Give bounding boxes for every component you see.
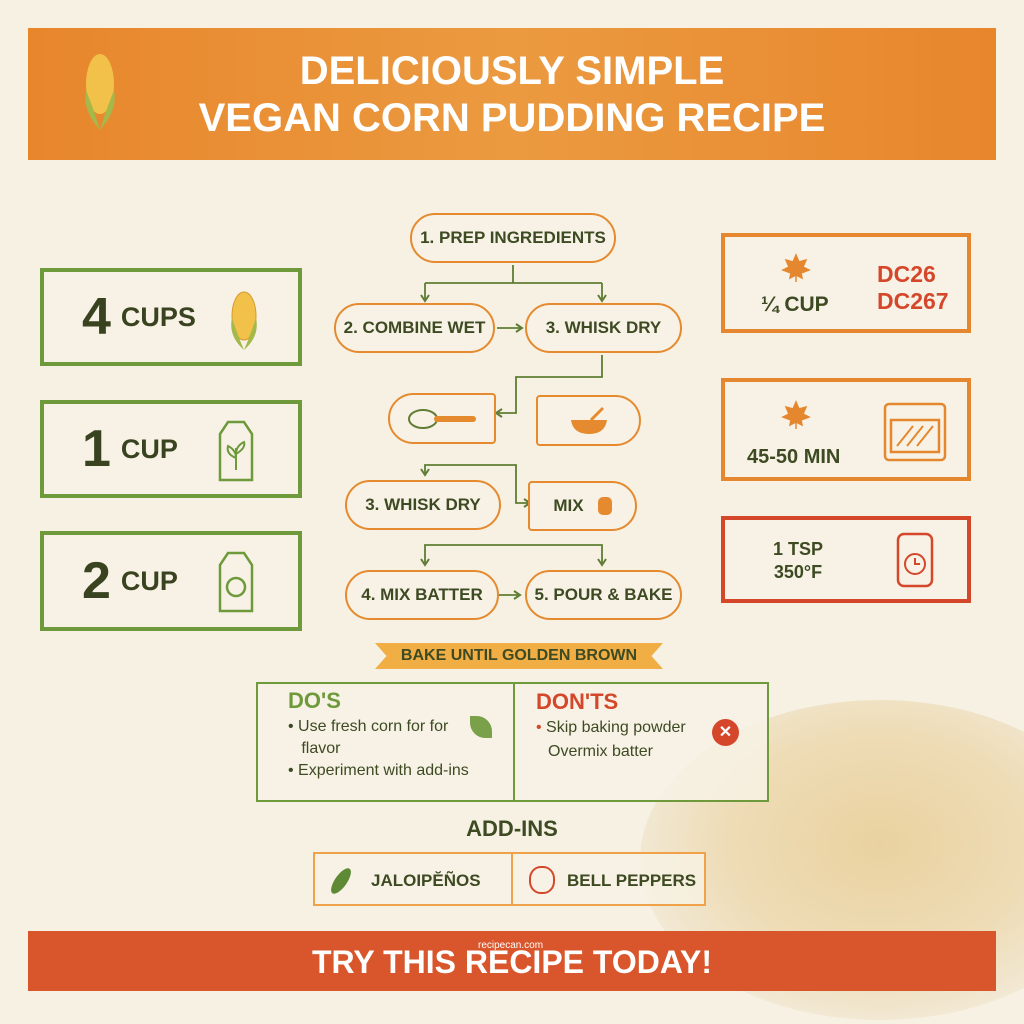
step 3 repeat: 3. WHISK DRY <box>365 495 481 514</box>
step 5 <box>525 570 682 620</box>
step 2: 2. COMBINE WET <box>344 318 485 337</box>
background pudding dish <box>640 700 1024 1020</box>
panel: 2 cup <box>40 531 302 631</box>
donts: DON'TS <box>536 689 618 714</box>
title: DELICIOUSLY SIMPLE <box>300 49 724 93</box>
dos: • Use fresh corn for for <box>288 718 448 735</box>
donts: • Skip baking powder <box>536 719 686 736</box>
panel: temp: 1 TSP <box>773 539 823 559</box>
panel: add-ins: BELL PEPPERS <box>567 871 696 890</box>
dos: • Experiment with add-ins <box>288 762 469 779</box>
title: VEGAN CORN PUDDING RECIPE <box>199 96 825 140</box>
icon: corn <box>85 54 115 130</box>
panel: 4 cups <box>40 268 302 366</box>
ribbon banner <box>375 643 663 669</box>
step mix: MIX <box>553 496 584 515</box>
dos: flavor <box>301 740 340 757</box>
step 3 repeat <box>345 480 501 530</box>
icon: leaf <box>470 716 492 738</box>
step 3: 3. WHISK DRY <box>546 318 661 337</box>
panel: 1/4 cup <box>721 233 971 333</box>
step 4 <box>345 570 499 620</box>
panel: 1/4 cup: DC267 <box>877 288 949 314</box>
panel: 1/4 cup: DC26 <box>877 261 936 287</box>
icon: whisk <box>388 393 496 444</box>
icon: x: ✕ <box>719 724 732 741</box>
footer banner: TRY THIS RECIPE TODAY! <box>312 944 712 980</box>
panel: 1 cup: 1 <box>82 420 111 478</box>
panel: 2 cup: 2 <box>82 552 111 610</box>
icon: bowl <box>536 395 641 446</box>
panel: dos and donts <box>256 682 769 802</box>
panel: 4 cups: CUPS <box>121 302 196 332</box>
footer banner <box>28 931 996 991</box>
header banner <box>28 28 996 160</box>
donts: Overmix batter <box>548 743 653 760</box>
step 1: 1. PREP INGREDIENTS <box>420 228 606 247</box>
panel: time: 45-50 MIN <box>747 446 840 468</box>
step 3 <box>525 303 682 353</box>
panel: 1/4 cup: ¼ CUP <box>761 293 829 316</box>
panel: 2 cup: CUP <box>121 566 178 596</box>
step 1 <box>410 213 616 263</box>
panel: temp: 350°F <box>774 562 822 582</box>
icon: leaf <box>781 400 811 429</box>
panel: 4 cups: 4 <box>82 288 111 346</box>
step 2 <box>334 303 495 353</box>
arrows <box>420 265 607 600</box>
step 4: 4. MIX BATTER <box>361 585 483 604</box>
icon: can <box>896 532 934 588</box>
icon: milk carton <box>218 420 254 482</box>
dos <box>288 688 492 779</box>
panel: 1 cup <box>40 400 302 498</box>
icon: bell pepper <box>529 866 555 894</box>
donts <box>536 689 739 760</box>
add-ins title: ADD-INS <box>466 816 558 841</box>
step mix <box>528 481 637 531</box>
icon: leaf <box>781 253 811 282</box>
footer banner: recipecan.com <box>478 940 543 951</box>
panel: time <box>721 378 971 481</box>
panel: 1 cup: CUP <box>121 434 178 464</box>
panel: add-ins <box>313 852 706 906</box>
icon: x <box>712 719 739 746</box>
panel: add-ins: JALOIPĔÑOS <box>371 871 481 890</box>
panel: temp <box>721 516 971 603</box>
flowchart <box>334 213 682 620</box>
icon: carton <box>218 552 254 612</box>
step 5: 5. POUR & BAKE <box>535 585 672 604</box>
icon: jalapeno <box>327 865 355 897</box>
dos: DO'S <box>288 688 341 713</box>
icon: corn <box>231 292 257 350</box>
title <box>198 49 825 140</box>
icon: oven <box>884 402 946 462</box>
ribbon banner: BAKE UNTIL GOLDEN BROWN <box>401 647 637 664</box>
